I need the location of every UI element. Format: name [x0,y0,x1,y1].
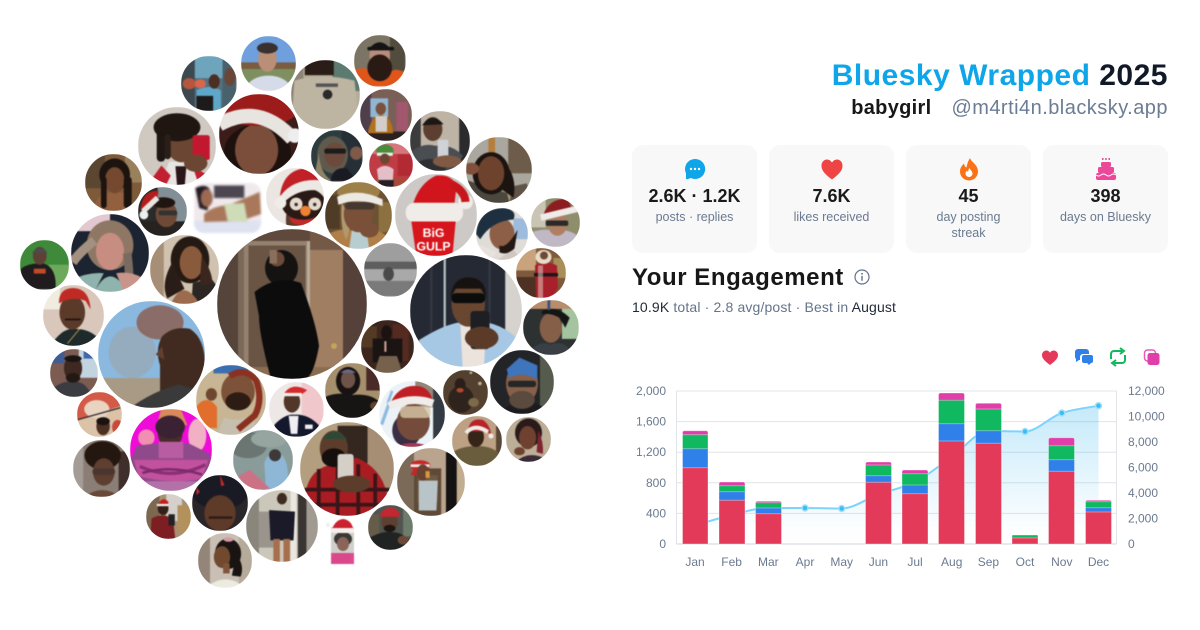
left axis labels: 0 [659,537,666,551]
avatar: man in green garden [20,240,69,290]
icon: heart [820,157,844,181]
month labels: Dec [1088,555,1109,569]
icon: info [854,269,870,285]
avatar: woman dark hair [150,235,219,304]
month labels [685,555,1109,569]
month labels: Jun [869,555,888,569]
avatar: man with red cap [43,285,104,346]
avatar: tree and man profile [98,301,205,408]
avatar: pink sweater with santa hat cutout [326,519,356,565]
right axis labels: 8,000 [1128,435,1158,449]
avatar: person in snow blue hoodie [233,430,293,490]
right axis labels: 10,000 [1128,410,1165,424]
stat card: streak: day posting [937,210,1000,224]
left axis labels [636,384,666,551]
cumulative area [695,406,1098,544]
avatar cloud [20,35,580,588]
avatar: santa hat with glasses woman [531,198,580,247]
legend: quotes squares [1144,350,1160,365]
avatar: big gulp cup with santa hat [395,174,477,256]
avatar: small dark sparkly [443,370,488,415]
avatar: big gulp cup with santa hat: BiG [423,226,444,240]
avatar: santa hat selfie [219,94,299,174]
avatar: man in red plaid with phone [300,422,394,516]
month labels: Aug [941,555,962,569]
month labels: Feb [721,555,742,569]
avatar: woman with locks [85,154,142,211]
right axis labels: 6,000 [1128,460,1158,474]
month labels: Mar [758,555,779,569]
stat card: days on Bluesky: 398 [1090,186,1121,206]
avatar: woman with afro [73,440,130,497]
right axis labels: 4,000 [1128,486,1158,500]
stacked bars [682,393,1112,544]
avatar: vintage santa photo [77,392,122,437]
avatar: woman in grey dress mirror [396,448,464,516]
legend: reposts arrows [1111,348,1125,366]
title: Bluesky Wrapped 2025 [832,59,1168,92]
avatar: man in car with cap [523,300,579,355]
avatar: santa hat big glasses with blue stripes [379,381,445,447]
avatar: woman with red streak hair [506,417,550,462]
avatar: magenta anime collage [130,409,212,491]
avatar: dreadlocks red phone [138,107,216,185]
avatar: man with cap leaning [476,208,528,260]
avatar: long hair man black tee [324,362,380,418]
avatar: man in tuxedo [269,382,324,437]
icon: flame [956,157,980,181]
stat card: likes: likes received [794,210,869,224]
avatar: woman in purple room [360,89,412,141]
avatar: raiders shirt [291,60,360,129]
avatar: man in santa suit [516,248,566,298]
chart: monthly engagement [620,380,1180,575]
stat card: posts and replies: 2.6K · 1.2K [648,186,741,206]
icon: cake [1094,157,1118,181]
legend: replies bubbles [1075,349,1093,365]
avatar: man with red cap and phone [368,505,413,550]
stat card: streak [906,145,1031,253]
left axis labels: 800 [646,476,666,490]
cumulative line [695,406,1098,525]
right axis labels: 12,000 [1128,384,1165,398]
month labels: Nov [1051,555,1072,569]
avatar: flowers selfie [181,56,237,111]
month labels: Jul [907,555,923,569]
handle row: babygirl @m4rti4n.blacksky.app [851,97,1168,119]
avatar: woman in red plaid with santa hat small [146,494,191,539]
avatar: woman with glasses and peace sign [311,130,363,182]
month labels: Jan [685,555,705,569]
avatar: dark room small [361,320,414,372]
stat card: likes: 7.6K [812,186,851,206]
left axis labels: 400 [646,506,666,520]
avatar: man under blue sky [241,36,296,91]
month labels: Oct [1016,555,1035,569]
avatar: big gulp cup with santa hat: GULP [416,239,451,253]
chart legend icons [1035,345,1165,369]
heading: your engagement: Your Engagement [632,264,844,291]
avatar: small santa with glasses [138,187,187,236]
avatar: man with colorful hat and long hair [325,182,392,249]
avatar: woman with blonde braids [71,214,149,292]
stat card: days on Bluesky [1043,145,1168,253]
avatar: blurred reclining photo [194,182,262,234]
right axis labels: 2,000 [1128,512,1158,526]
month labels: Apr [796,555,814,569]
stat card: posts and replies [632,145,757,253]
engagement summary: 10.9K total · 2.8 avg/post · Best in August [632,299,896,315]
avatar: woman with bow bottom [198,533,252,588]
right axis labels: 0 [1128,537,1135,551]
avatar: santa sitting man [452,416,502,466]
avatar: man in blue paper crown [490,350,554,414]
avatar: small man portrait [50,349,98,397]
avatar: large mirror selfie in black dress [217,229,367,379]
avatar: mirror full body [246,490,318,562]
icon: chat bubble [682,157,706,181]
avatar: small santa in colorful room [369,143,413,187]
left axis labels: 1,600 [636,415,666,429]
legend: likes heart [1042,350,1058,365]
stat card: days on Bluesky: days on Bluesky [1060,210,1151,224]
stat card: streak: streak [951,226,986,240]
avatar: beard orange hoodie [354,35,406,87]
left axis labels: 2,000 [636,384,666,398]
avatar: santa puppet [266,168,324,226]
avatar: grey beach photo [364,243,417,297]
avatar: man with sunglasses and phone [410,255,522,367]
month labels: May [830,555,853,569]
left axis labels: 1,200 [636,445,666,459]
stat card: likes [769,145,894,253]
avatar: man with phone in grey tee [410,111,470,171]
month labels: Sep [978,555,999,569]
cumulative points [802,403,1102,512]
avatar: close up man dark [192,475,248,531]
avatar: man with red braids and drink [196,365,266,435]
right axis labels [1128,384,1165,551]
stat card: posts and replies: posts · replies [656,210,733,224]
stat card: streak: 45 [958,186,979,206]
avatar: woman peace sign mirror [466,137,532,203]
